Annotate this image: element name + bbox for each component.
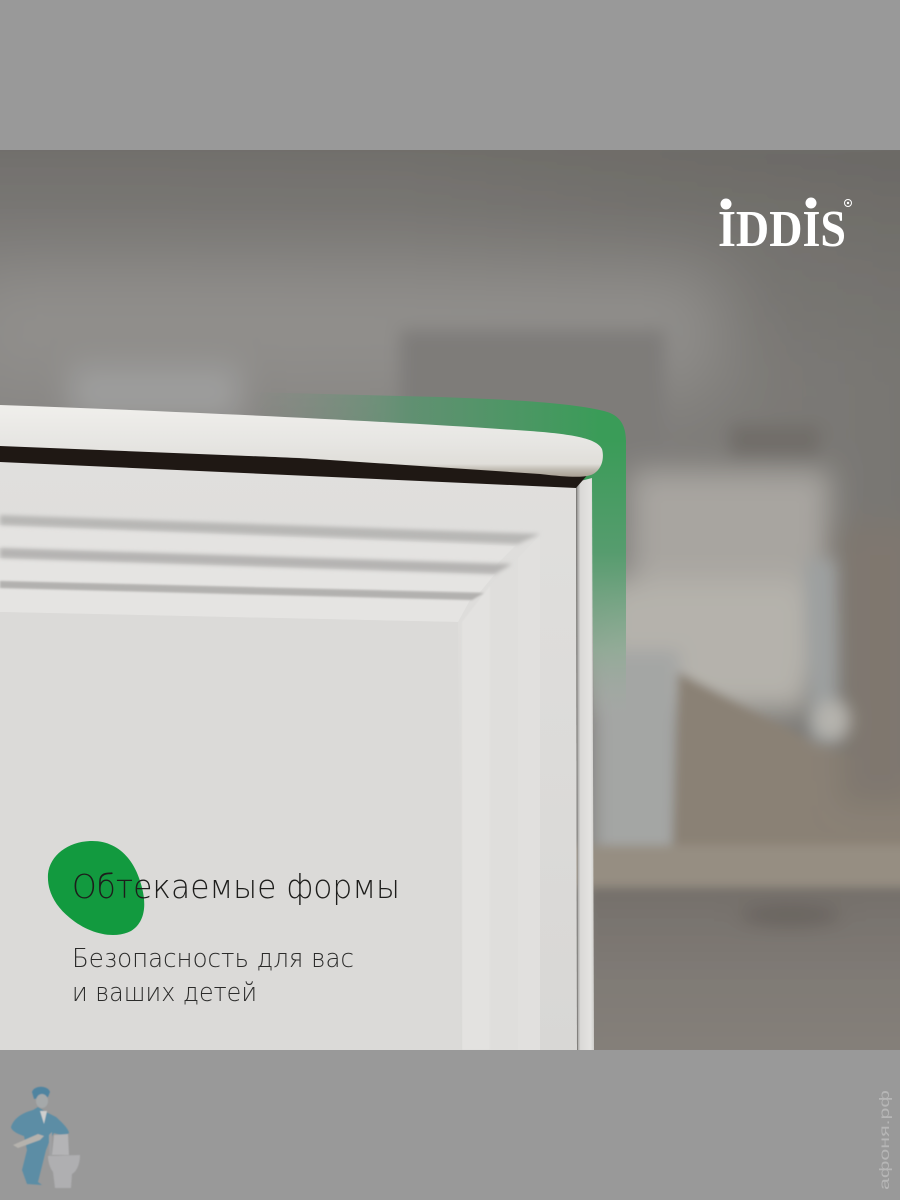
bottom grey band: [0, 1050, 900, 1200]
door moulding frame: [0, 515, 540, 1050]
green blob accent: [48, 841, 144, 935]
dark gap under the top: [0, 444, 590, 488]
icon: plumber with toilet watermark: [11, 1087, 80, 1188]
watermark text: афоня.рф: [876, 1090, 892, 1190]
logo: IDDIS: IDDIS: [718, 201, 846, 258]
panel: blurred bathroom background photo: [0, 150, 900, 1050]
green highlight glow along the cabinet edge: [250, 392, 626, 720]
heading: Обтекаемые формы: [72, 867, 400, 906]
subtitle text: [72, 944, 354, 1008]
cabinet rounded top slab: [0, 405, 603, 477]
subtitle text: Безопасность для вас: [72, 944, 354, 974]
panel: cabinet door: [0, 460, 577, 1050]
subtitle text: и ваших детей: [72, 978, 257, 1008]
top grey band: [0, 0, 900, 150]
cabinet side strip: [577, 478, 594, 1050]
